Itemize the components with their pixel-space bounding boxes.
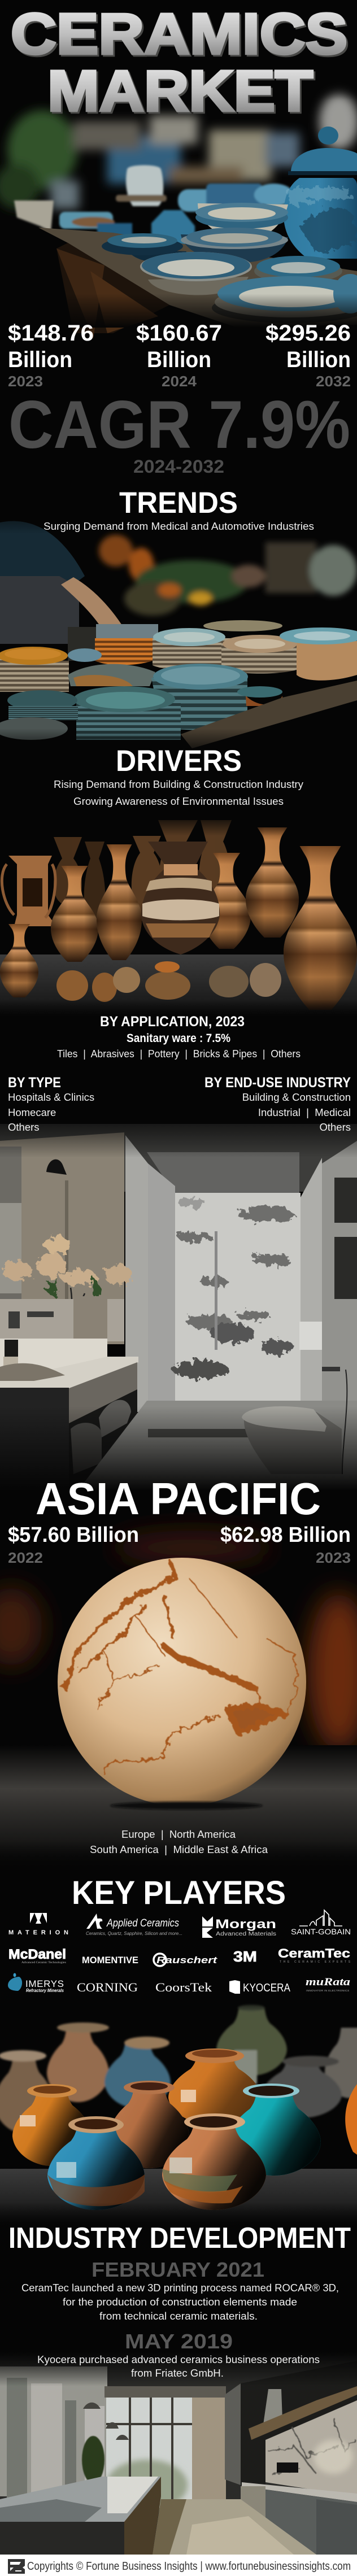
icon: Fortune Business Insights mark bbox=[8, 2559, 25, 2574]
vase: far right bbox=[284, 846, 357, 1010]
drivers photo: terracotta vases bbox=[0, 813, 357, 1017]
floor bbox=[69, 1401, 357, 1502]
market value 2023: 2023 bbox=[8, 373, 43, 390]
by type: Homecare bbox=[8, 1106, 56, 1118]
development: February 2021: for the production of construction elements made bbox=[63, 2296, 297, 2308]
orange pot bbox=[168, 2052, 261, 2125]
vase: centre left bbox=[97, 844, 142, 960]
left urn bbox=[8, 856, 56, 926]
development: May 2019 bbox=[37, 2330, 320, 2379]
asia pacific heading: ASIA PACIFIC bbox=[36, 1474, 321, 1524]
title line: ceramics: CERAMICS bbox=[11, 2, 347, 66]
top and bottom fade bbox=[0, 67, 357, 101]
logos bbox=[8, 1910, 351, 1994]
kitchen photo bbox=[0, 2352, 357, 2555]
development: February 2021 bbox=[21, 2258, 339, 2322]
globe contact shadow bbox=[110, 1802, 263, 1810]
counter bbox=[0, 1357, 138, 1388]
plate stacks bbox=[68, 627, 99, 661]
floor bbox=[153, 2499, 316, 2555]
asia pacific 2022 bbox=[8, 1523, 139, 1566]
development: May 2019: from Friatec GmbH. bbox=[131, 2367, 224, 2379]
left wall and windows bbox=[0, 2366, 107, 2496]
logo: Rauschert: Rauschert bbox=[156, 1955, 218, 1965]
by end-use industry: Others bbox=[319, 1121, 351, 1133]
marble backsplash bbox=[265, 2400, 357, 2496]
logo: Materion bbox=[8, 1913, 68, 1936]
back wall bbox=[192, 2392, 226, 2508]
market value 2032: Billion bbox=[286, 347, 351, 372]
logo: Morgan: Morgan bbox=[215, 1917, 276, 1931]
hero photo: blue and white ceramics on a table bbox=[0, 0, 357, 339]
market value 2023 bbox=[8, 321, 94, 390]
blue plates bbox=[151, 678, 247, 730]
market value 2032 bbox=[265, 321, 351, 390]
logo: CeramTec bbox=[278, 1946, 351, 1964]
logo: Applied Ceramics: Ceramics, Quartz, Sapphire, Silicon and more... bbox=[86, 1930, 182, 1936]
drivers description bbox=[54, 778, 304, 807]
big jar bbox=[284, 127, 357, 259]
by type: Hospitals & Clinics bbox=[8, 1091, 94, 1103]
logo: Murata bbox=[306, 1976, 351, 1992]
logo: CeramTec: CeramTec bbox=[278, 1946, 350, 1960]
island top bbox=[0, 2477, 161, 2522]
logo: Saint-Gobain: SAINT-GOBAIN bbox=[291, 1927, 351, 1936]
leading application: Sanitary ware : 7.5% bbox=[127, 1032, 230, 1045]
cyan pot bbox=[228, 2089, 321, 2176]
flowers bbox=[2, 1236, 133, 1299]
plant bbox=[82, 2436, 105, 2483]
back vases bbox=[54, 820, 232, 926]
right cabinets bbox=[241, 2486, 357, 2555]
title bbox=[11, 2, 347, 123]
logo: Applied Ceramics: Applied Ceramics bbox=[106, 1917, 179, 1929]
logo: 3M: 3M bbox=[233, 1948, 257, 1965]
vase: centre right bbox=[202, 853, 251, 949]
trends description: Surging Demand from Medical and Automotive Industries bbox=[43, 520, 314, 532]
fades bbox=[0, 1107, 357, 1158]
terracotta pot bbox=[109, 2084, 189, 2168]
logo: McDanel: McDanel bbox=[8, 1947, 66, 1962]
market value 2032: 2032 bbox=[316, 373, 351, 390]
right edge orange pot bbox=[345, 2084, 357, 2155]
asia pacific 2022: 2022 bbox=[8, 1549, 43, 1566]
development: February 2021: CeramTec launched a new 3D printing process named ROCAR® 3D, bbox=[21, 2282, 339, 2294]
key players heading: KEY PLAYERS bbox=[72, 1875, 286, 1911]
person bbox=[0, 521, 85, 593]
asia pacific 2022: $57.60 Billion bbox=[8, 1523, 139, 1547]
sink bbox=[0, 1339, 107, 1372]
logo: Morgan bbox=[202, 1916, 276, 1938]
towel and tap wall bbox=[0, 1299, 124, 1341]
logo: Imerys bbox=[8, 1973, 64, 1993]
left wall bbox=[0, 1132, 124, 1344]
logo: Kyocera: KYOCERA bbox=[243, 1982, 291, 1994]
trends heading: TRENDS bbox=[119, 486, 238, 520]
ceiling bbox=[0, 1124, 357, 1192]
drivers description: Growing Awareness of Environmental Issues bbox=[73, 795, 284, 807]
market value 2024: Billion bbox=[147, 347, 211, 372]
CAGR period: 2024-2032 bbox=[133, 456, 224, 477]
hood and shelves bbox=[263, 2389, 282, 2429]
market value 2024: $160.67 bbox=[136, 321, 222, 346]
small pots on the floor bbox=[56, 961, 281, 1002]
market value 2032: $295.26 bbox=[265, 321, 351, 346]
logo: CoorsTek: CoorsTek bbox=[155, 1980, 212, 1994]
cabinet bbox=[0, 1388, 69, 1491]
asia pacific 2023 bbox=[220, 1523, 351, 1566]
vase: bottom left bbox=[0, 924, 38, 997]
logo: CeramTec: THE CERAMIC EXPERTS bbox=[280, 1960, 351, 1964]
development: February 2021: FEBRUARY 2021 bbox=[92, 2258, 264, 2281]
market value 2024 bbox=[136, 321, 222, 390]
globe photo bbox=[0, 1531, 357, 1869]
back window bbox=[106, 2398, 192, 2508]
right wall bbox=[301, 1158, 322, 1468]
other applications: Tiles | Abrasives | Pottery | Bricks & Pipes | Others bbox=[57, 1048, 301, 1060]
stacked bowls bbox=[102, 203, 288, 263]
drivers description: Rising Demand from Building & Construction Industry bbox=[54, 778, 304, 790]
logo: Imerys: IMERYS bbox=[25, 1978, 64, 1989]
globe cracks bbox=[64, 1563, 296, 1774]
by end-use industry bbox=[204, 1075, 351, 1133]
table edge bbox=[181, 681, 357, 748]
trends photo: plates being stacked bbox=[0, 500, 357, 757]
orange bowl bbox=[0, 658, 69, 692]
logo: Morgan: Advanced Materials bbox=[216, 1931, 276, 1937]
blue front pot bbox=[47, 2121, 145, 2210]
radiator bbox=[334, 1178, 357, 1299]
logo: McDanel: Advanced Ceramic Technologies bbox=[21, 1961, 66, 1964]
right tall unit bbox=[225, 2383, 241, 2485]
island body bbox=[0, 2522, 124, 2555]
market value 2024: 2024 bbox=[162, 373, 197, 390]
central vase bbox=[141, 842, 220, 954]
logo: Kyocera bbox=[229, 1980, 291, 1994]
vase: left bbox=[51, 866, 98, 962]
asia pacific 2023: 2023 bbox=[316, 1549, 351, 1566]
lamp bbox=[46, 1160, 67, 1175]
logo: Applied Ceramics bbox=[86, 1914, 182, 1936]
by end-use industry: Industrial | Medical bbox=[258, 1106, 351, 1118]
centre wall bbox=[125, 1135, 148, 1412]
bathroom photo bbox=[0, 1107, 357, 1502]
by type: Others bbox=[8, 1121, 40, 1133]
title line: market: MARKET bbox=[47, 59, 313, 123]
logo: Murata: muRata bbox=[306, 1976, 351, 1988]
market value 2023: $148.76 bbox=[8, 321, 94, 346]
logo: Materion: MATERION bbox=[8, 1929, 68, 1936]
by end-use industry: Building & Construction bbox=[242, 1091, 351, 1103]
vase: right bbox=[246, 827, 299, 938]
pots photo bbox=[0, 1999, 357, 2225]
development: May 2019: Kyocera purchased advanced ceramics business operations bbox=[37, 2353, 320, 2365]
other regions bbox=[90, 1828, 268, 1855]
logo: Murata: INNOVATOR IN ELECTRONICS bbox=[306, 1989, 349, 1992]
logo: Imerys: Refractory Minerals bbox=[26, 1988, 64, 1993]
footer bbox=[0, 2555, 357, 2576]
logo: Rauschert bbox=[154, 1954, 218, 1966]
blurred back pots bbox=[0, 2004, 357, 2133]
left orange pot bbox=[12, 2087, 92, 2166]
market value 2023: Billion bbox=[8, 347, 72, 372]
other regions: South America | Middle East & Africa bbox=[90, 1843, 268, 1855]
plates in the foreground bbox=[140, 252, 357, 323]
drivers heading: DRIVERS bbox=[116, 744, 242, 778]
development: May 2019: MAY 2019 bbox=[125, 2330, 233, 2353]
left cloth table bbox=[14, 200, 54, 232]
by type: BY TYPE bbox=[8, 1075, 61, 1091]
other regions: Europe | North America bbox=[121, 1828, 236, 1840]
logo: Corning: CORNING bbox=[77, 1980, 138, 1994]
tan front pot bbox=[162, 2118, 266, 2210]
asia pacific 2023: $62.98 Billion bbox=[220, 1523, 351, 1547]
logo: Saint-Gobain bbox=[291, 1910, 351, 1936]
toilet bbox=[244, 1408, 342, 1474]
countertop bbox=[242, 2482, 357, 2502]
table bbox=[38, 228, 357, 328]
by type bbox=[8, 1075, 94, 1133]
by application heading: BY APPLICATION, 2023 bbox=[100, 1014, 245, 1030]
shower wall bbox=[175, 1193, 301, 1407]
logo: Momentive: MOMENTIVE bbox=[82, 1955, 138, 1965]
pendant lamps bbox=[83, 2403, 129, 2440]
development: February 2021: from technical ceramic materials. bbox=[99, 2310, 258, 2322]
globe sphere bbox=[58, 1558, 306, 1806]
